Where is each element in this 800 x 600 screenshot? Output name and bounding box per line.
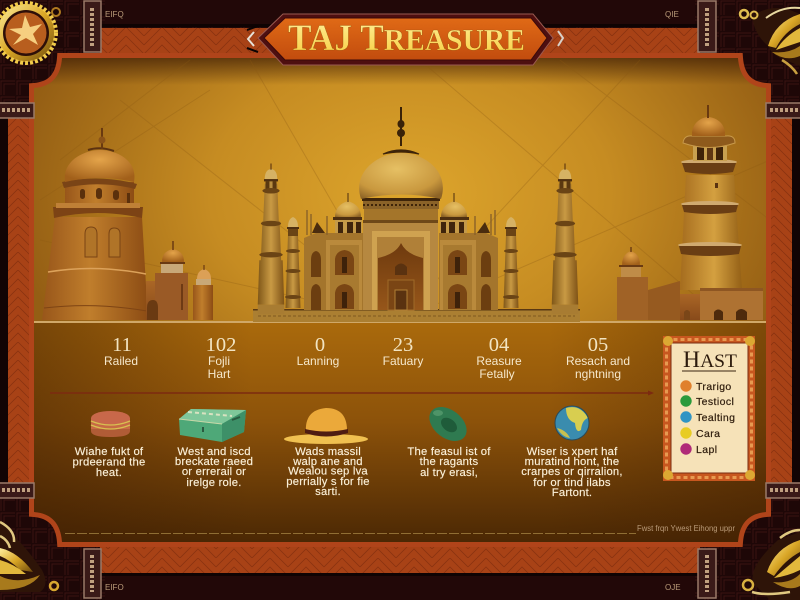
icon: copper tin [91, 411, 130, 437]
description column 1 [73, 446, 145, 479]
stat: 04 Reasure Fetally: 04 [489, 334, 509, 356]
footer note: Fwst frqn Ywest Eihong uppr [637, 524, 735, 533]
stat: 04 Reasure Fetally [476, 334, 522, 381]
legend item: Trarigo: Trarigo [696, 381, 732, 393]
legend item: Trarigo [680, 380, 732, 393]
stat: 05 Resach and nightning: nghtning [575, 367, 621, 381]
description column 2: irelge role. [186, 477, 242, 489]
panel: legend card [663, 336, 755, 481]
description column 1: prdeerand the [73, 456, 145, 468]
small frame marks: OJE [665, 583, 681, 592]
stat: 102 Foji Hart: Fojli [208, 354, 230, 368]
description column 5: crarpes or qirralion, [521, 466, 623, 478]
legend item: Lapl: Lapl [696, 444, 717, 456]
small frame marks: QIE [665, 10, 679, 19]
small frame marks [105, 10, 681, 592]
legend item: Lapl [680, 443, 717, 456]
small frame marks: EIFO [105, 583, 124, 592]
legend item: Tealting: Tealting [696, 412, 735, 424]
description column 2: breckate raeed [175, 456, 253, 468]
stat: 0 Lanning [297, 334, 339, 368]
stat: 0 Lanning: Lanning [297, 354, 339, 368]
legend item: Cars: Cara [696, 428, 720, 440]
description column 3 [286, 446, 370, 498]
legend item: Cars [680, 427, 720, 440]
stat: 05 Resach and nightning: 05 [588, 334, 608, 356]
icon: green case [179, 409, 246, 442]
icon: top right ornament [740, 8, 800, 74]
stat: 11 Railed [104, 334, 138, 368]
description column 4: the ragants [420, 456, 479, 468]
banner chevrons [247, 26, 563, 52]
stat: 11 Railed: Railed [104, 354, 138, 368]
panel: lower information area [30, 321, 770, 544]
title text: TAJ TREASURE [288, 18, 525, 59]
description column 3: perrially s for fie [286, 476, 370, 488]
description column 5: muratind hont, the [525, 456, 619, 468]
description column 3: walp ane and [292, 456, 363, 468]
stat: 102 Foji Hart [206, 334, 236, 381]
title banner [258, 14, 553, 65]
stat: 102 Foji Hart: Hart [208, 367, 231, 381]
stat: 23 Fatuary [383, 334, 423, 368]
description column 5: Wiser is xpert haf [527, 446, 618, 458]
description column 2: or errerail or [182, 466, 246, 478]
stat: 04 Reasure Fetally: Fetally [479, 367, 515, 381]
description column 5 [521, 446, 623, 499]
small frame marks: EIFQ [105, 10, 124, 19]
side wings [304, 193, 498, 310]
description column 5: Fartont. [552, 487, 592, 499]
description column 1: Wiahe fukt of [75, 446, 144, 458]
icon: jade stone [423, 400, 473, 448]
legend item: Tealting [680, 411, 735, 424]
icon: gold medallion [0, 3, 60, 63]
description column 1: heat. [96, 467, 122, 479]
illustration: left small buildings [146, 241, 213, 320]
description column 4 [407, 446, 491, 479]
stat: 11 Railed: 11 [112, 334, 132, 356]
stat: 05 Resach and nightning [566, 334, 630, 381]
central iwan with arch [363, 220, 438, 310]
legend item: Testiocl: Testiocl [696, 396, 734, 408]
description column 3: Wealou sep lva [288, 466, 368, 478]
description column 2: West and iscd [177, 446, 251, 458]
description column 2 [175, 446, 253, 489]
description column 4: The feasul ist of [407, 446, 491, 458]
description column 3: Wads massil [295, 446, 361, 458]
icon: straw hat [284, 408, 368, 444]
illustration: left domed tower [42, 128, 148, 320]
icon: bottom right ornament [743, 530, 800, 600]
description column 4: al try erasi, [420, 467, 478, 479]
minarets [258, 163, 578, 314]
right small turret [619, 247, 643, 277]
icon: bottom left ornament [0, 522, 58, 592]
timeline arrow [50, 390, 654, 396]
legend heading: HAST [683, 347, 737, 372]
illustration: right minaret tower [617, 105, 763, 320]
stat: 102 Foji Hart: 102 [206, 334, 236, 356]
stat: 0 Lanning: 0 [315, 334, 325, 356]
description column 3: sarti. [315, 486, 341, 498]
stat: 05 Resach and nightning: Resach and [566, 354, 630, 368]
central dome [359, 107, 443, 222]
illustration: Taj Mahal [253, 107, 580, 322]
stat: 23 Fatuary: 23 [393, 334, 413, 356]
panel: illustration sky [30, 55, 770, 325]
legend item: Testiocl [680, 395, 734, 408]
description column 5: for or tind ilabs [533, 477, 611, 489]
stat: 04 Reasure Fetally: Reasure [476, 354, 522, 368]
icon: globe [555, 406, 589, 440]
stat: 23 Fatuary: Fatuary [383, 354, 423, 368]
